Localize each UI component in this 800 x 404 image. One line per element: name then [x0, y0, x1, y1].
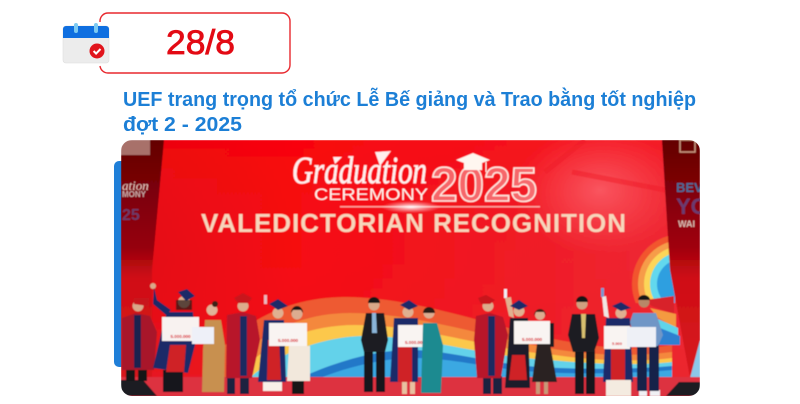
- person 2: graduate with raised arm: [150, 283, 195, 392]
- stage backdrop: [151, 140, 690, 378]
- date badge: [100, 13, 290, 73]
- left side banner: 25: [122, 207, 140, 224]
- ceremony title: Graduation Ceremony 2025: 2025: [431, 159, 537, 212]
- cheque 3: 5.000.000: [522, 337, 543, 342]
- rainbow arc right: [632, 236, 676, 304]
- right side banner: YO: [676, 194, 708, 219]
- person 6: woman in white: [287, 306, 310, 394]
- icon: calendar with check badge: [63, 23, 109, 63]
- person 5: graduate with trophy: [258, 295, 288, 391]
- person 4: lecturer in red gown: [226, 293, 260, 394]
- subtitle: valedictorian recognition: VALEDICTORIAN RECOGNITION: [201, 208, 626, 238]
- cheques 4 and 5: 5.000: [612, 341, 623, 346]
- heading: UEF trang trọng tổ chức Lễ Bế giảng và Trao bằng tốt nghiệp: [123, 87, 696, 111]
- left side banner: ation: [122, 178, 149, 193]
- cheque 2: 5.000.000: [278, 338, 299, 343]
- person 14: graduate with trophy: [601, 288, 633, 396]
- rainbow stripes right: [645, 296, 680, 345]
- person 11: graduate with trophy: [504, 289, 530, 388]
- person 8: graduate with cheque: 5.000.000: [405, 340, 426, 345]
- right side banner: BEV: [676, 180, 703, 195]
- photo: graduation ceremony stage: [121, 140, 700, 396]
- person 12: woman in dark dress: [532, 309, 557, 394]
- ceremony title: Graduation Ceremony 2025: Graduation: [292, 150, 427, 192]
- cheque 2: [269, 323, 307, 346]
- cheque 3: [514, 321, 550, 344]
- speakers: [121, 380, 700, 396]
- heading: đợt 2 - 2025: [123, 113, 242, 136]
- left side banner: MONY: [122, 190, 147, 199]
- cheques 4 and 5: [604, 326, 656, 349]
- person 13: official in dark suit: [568, 296, 599, 394]
- stage floor: [121, 377, 700, 397]
- ceremony title: Graduation Ceremony 2025: CEREMONY: [314, 185, 428, 204]
- person 7: official in dark suit: [361, 297, 388, 392]
- person 1: lecturer in red gown: [122, 298, 157, 381]
- date badge: 28/8: [166, 24, 235, 62]
- person 8: graduate with cheque: [390, 300, 424, 395]
- cheque 1: [162, 317, 199, 341]
- blue accent bar: [114, 161, 122, 367]
- right side banner: [662, 140, 700, 378]
- person 15: man in blue shirt: [630, 295, 663, 396]
- cheque 1: 5.000.000: [170, 334, 191, 339]
- person 3: woman in patterned dress: [192, 301, 225, 392]
- rainbow bands: [203, 297, 672, 378]
- person 10: lecturer in red gown: [474, 295, 508, 394]
- left side banner: [121, 140, 164, 378]
- person 9: woman in teal ao dai: [421, 307, 443, 393]
- heading: [123, 87, 696, 136]
- ceremony title: Graduation Ceremony 2025: [292, 150, 540, 213]
- right side banner: WAI: [678, 219, 695, 229]
